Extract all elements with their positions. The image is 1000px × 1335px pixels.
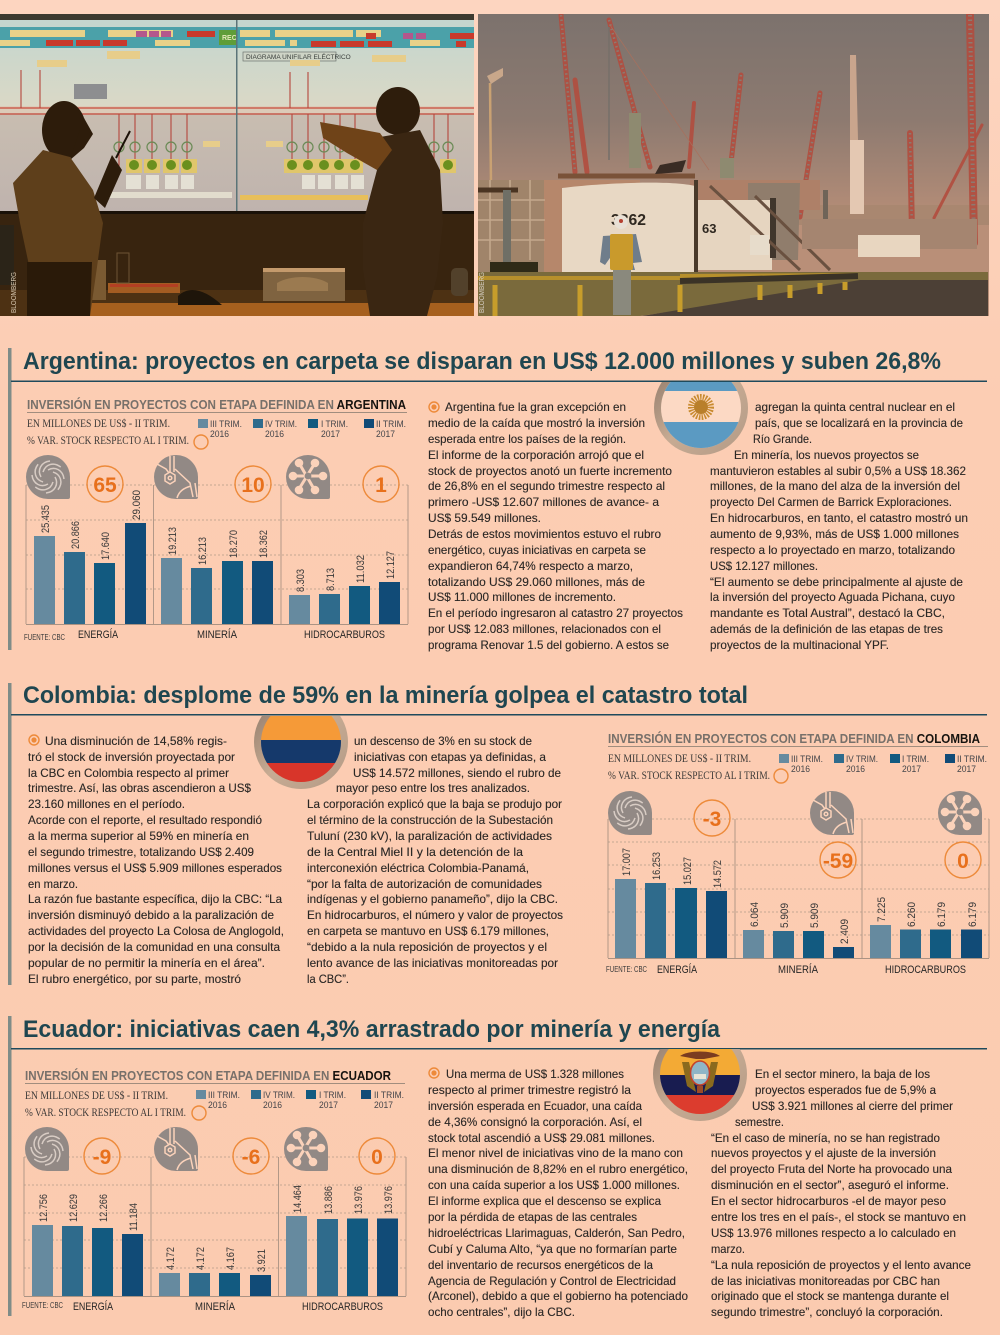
text column: Argentina 2: agregan la quinta central nuclear en el	[755, 400, 955, 414]
text column: Colombia 1: Una disminución de 14,58% regis-	[45, 734, 227, 748]
badge: hydrocarbons variation	[945, 842, 981, 878]
text column: Argentina 2: país, que se localizará en la provincia de	[755, 416, 963, 430]
text column: Ecuador 2: originado que el stock se mantenga durante el	[711, 1289, 949, 1303]
chart: Ecuador: MINERÍA	[195, 1300, 236, 1313]
text column: Ecuador 2: marzo.	[711, 1242, 745, 1256]
text column: Ecuador 1: Cubí y Caluma Alto, “ya que no formarían parte	[428, 1242, 677, 1256]
text column: Colombia 1: el segundo trimestre, totalizando US$ 2.409	[28, 845, 254, 859]
text column: Ecuador 1: ocho centrales”, dijo la CBC.	[428, 1305, 575, 1319]
legend: III TRIM.	[210, 419, 242, 430]
icon: bullet	[429, 1068, 439, 1078]
text column: Argentina 2: la inversión del proyecto Aguada Pichana, cuyo	[710, 590, 955, 604]
bars: hydrocarbons: 8.713	[325, 568, 337, 591]
text column: Argentina 2: Río Grande.	[753, 432, 812, 446]
legend: III TRIM.	[208, 1090, 240, 1101]
text column: Colombia 2: indígenas y el gobierno panameño”, dijo la CBC.	[307, 892, 558, 906]
text column: Argentina 2: proyectos de la multinacional YPF.	[710, 638, 889, 652]
text column: Colombia 2: el término de la construcción de la Subestación	[307, 813, 553, 827]
bars: mining: 18.270	[228, 530, 240, 558]
legend: II TRIM.	[957, 754, 987, 765]
text column: Argentina 1: totalizando US$ 29.060 millones, más de	[428, 575, 645, 589]
text column: Colombia 1: popular de no permitir la minería en el área”.	[28, 956, 265, 970]
bars: mining: 6.064	[749, 902, 761, 927]
text column: Colombia 2: lento avance de las iniciativas monitoreadas por	[307, 956, 558, 970]
icon: mining	[154, 1127, 198, 1171]
chart: Argentina: MINERÍA	[197, 628, 238, 641]
text column: Colombia 1: millones versus el US$ 5.909 millones esperados	[28, 861, 282, 875]
text column: Argentina 2: mantuvieron estables al subir 0,5% a US$ 18.362	[710, 464, 966, 478]
bars: energy: 29.060	[131, 490, 143, 520]
text column: Colombia 2: US$ 14.572 millones, siendo el rubro de	[353, 766, 561, 780]
text column: Argentina 2: millones, de la mano del alza de la inversión del	[710, 479, 960, 493]
bars: mining: 4.172	[165, 1247, 177, 1270]
bars: hydrocarbons: 13.886	[323, 1186, 335, 1214]
text column: Ecuador 1: hidroeléctricas Llarimaguas, Calderón, San Pedro,	[428, 1226, 685, 1240]
text column: Colombia 1	[28, 734, 284, 986]
bars: energy: 16.253	[651, 852, 663, 880]
chart: Ecuador	[22, 1068, 406, 1313]
text column: Colombia 1: trimestre. Así, las obras ascendieron a US$	[28, 781, 251, 795]
panel: Colombia	[8, 682, 989, 986]
bars: hydrocarbons: 13.976	[383, 1186, 395, 1214]
text column: Ecuador 1: (Arconel), debido a que el gobierno ha potenciado	[428, 1289, 688, 1303]
chart: Colombia: HIDROCARBUROS	[885, 964, 966, 976]
bars: hydrocarbons: 11.032	[355, 555, 367, 583]
panel: Argentina	[8, 348, 987, 652]
chart: Ecuador: HIDROCARBUROS	[302, 1301, 383, 1313]
text column: Colombia 2: iniciativas con etapas ya definidas, a	[354, 750, 546, 764]
legend: 2016	[208, 1100, 227, 1111]
chart: Colombia: ENERGÍA	[657, 963, 698, 976]
text column: Colombia 1: Acorde con el reporte, el resultado respondió	[28, 813, 262, 827]
text column: Argentina 1: esperada entre los países de la región.	[428, 432, 626, 446]
bars: energy: 12.629	[68, 1194, 80, 1222]
bars: hydrocarbons	[870, 897, 982, 958]
icon: Ecuador flag	[653, 1049, 747, 1121]
icon: energy	[25, 1127, 69, 1171]
legend	[196, 1090, 404, 1111]
text column: Colombia 2: un descenso de 3% en su stock de	[354, 734, 532, 748]
bars: mining: 5.909	[779, 903, 791, 928]
text column: Argentina 1: Detrás de estos movimientos estuvo el rubro	[428, 527, 661, 541]
chart: Colombia: % VAR. STOCK RESPECTO AL I TRIM.	[608, 770, 770, 782]
chart: Ecuador: EN MILLONES DE US$ - II TRIM.	[25, 1089, 168, 1102]
text column: Argentina 1: US$ 59.549 millones.	[428, 511, 541, 525]
bars: energy: 20.866	[70, 521, 82, 549]
chart title: INVERSIÓN EN PROYECTOS CON ETAPA DEFINIDA EN ECUADOR	[25, 1068, 392, 1083]
legend: 2017	[957, 764, 976, 775]
heading: Colombia: Colombia: desplome de 59% en la minería golpea el catastro total	[23, 682, 748, 709]
chart: Argentina: % VAR. STOCK RESPECTO AL I TRIM.	[27, 435, 189, 447]
bars: mining: 16.213	[197, 537, 209, 565]
text column: Argentina 2: mandante es Total Austral”, destacó la CBC,	[710, 606, 945, 620]
chart: Colombia: EN MILLONES DE US$ - II TRIM.	[608, 752, 751, 765]
badge: mining variation	[235, 466, 271, 502]
legend: 2016	[265, 429, 284, 440]
legend: 2017	[374, 1100, 393, 1111]
text column: Ecuador 2: semestre.	[735, 1115, 784, 1129]
chart: Colombia: MINERÍA	[778, 963, 819, 976]
text column: Colombia 1: tró el stock de inversión proyectada por	[28, 750, 235, 764]
text column: Ecuador 2: En el sector hidrocarburos -el de mayor peso	[711, 1194, 946, 1208]
bars: hydrocarbons: 7.225	[876, 897, 888, 922]
text column: Ecuador 2: nuevos proyectos y el ajuste de la inversión	[711, 1146, 936, 1160]
text column: Argentina 2: aumento de 9,93%, más de US$ 1.000 millones	[710, 527, 959, 541]
text column: Colombia 2: la CBC”.	[307, 972, 349, 986]
heading: Argentina: Argentina: proyectos en carpeta se disparan en US$ 12.000 millones y suben 26,8%	[23, 348, 941, 375]
text column: Argentina 1: El informe de la corporación arrojó que el	[428, 448, 644, 462]
text column: Ecuador 1: Agencia de Regulación y Control de Electricidad	[428, 1274, 676, 1288]
text column: Argentina 1: por US$ 12.083 millones, relacionados con el	[428, 622, 661, 636]
text column: Colombia 2: “debido a la nula reposición de proyectos y el	[307, 940, 547, 954]
bars: energy: 25.435	[40, 505, 52, 533]
photo: industrial plant: 63	[702, 221, 716, 236]
text column: Ecuador 2: entre los tres en el país-, el stock se mantuvo en	[711, 1210, 966, 1224]
text column: Argentina 2: En minería, los nuevos proyectos se	[734, 448, 919, 462]
text column: Ecuador 1: inversión esperada en Ecuador, una caída	[428, 1099, 642, 1113]
bars: hydrocarbons: 6.260	[906, 902, 918, 927]
bars: mining: 4.167	[225, 1247, 237, 1270]
bars: mining: 2.409	[839, 919, 851, 944]
icon: bullet	[29, 735, 39, 745]
bars: mining	[161, 527, 273, 624]
text column: Colombia 1: 23.160 millones en el período.	[28, 797, 185, 811]
text column: Colombia 2: “por la falta de autorización de comunidades	[307, 877, 542, 891]
text column: Colombia 2: en carpeta se mantuvo en US$ 6.179 millones,	[307, 924, 549, 938]
badge: energy variation	[87, 466, 123, 502]
text column: Colombia 2: La corporación explicó que la baja se produjo por	[307, 797, 562, 811]
text column: Ecuador 2	[711, 1067, 971, 1319]
text column: Argentina 2	[710, 400, 968, 652]
badge: hydrocarbons variation: 0	[957, 850, 969, 873]
icon: mining	[810, 791, 854, 835]
bars: energy: 15.027	[682, 857, 694, 885]
bars: hydrocarbons: 6.179	[967, 902, 979, 927]
icon: mining	[154, 455, 198, 499]
badge: hydrocarbons variation: 1	[375, 474, 387, 497]
text column: Colombia 2: de la Central Miel II y la detención de la	[307, 845, 523, 859]
panel: Ecuador	[8, 1016, 987, 1319]
bars: hydrocarbons: 12.127	[385, 551, 397, 579]
legend: 2016	[791, 764, 810, 775]
text column: Argentina 1: programa Renovar 1.5 del gobierno. A estos se	[428, 638, 669, 652]
bars: mining: 5.909	[809, 903, 821, 928]
badge: hydrocarbons variation	[359, 1138, 395, 1174]
text column: Ecuador 1: del inventario de recursos energéticos de la	[428, 1258, 653, 1272]
text column: Ecuador 1: de 4,36% consignó la corporación. Así, el	[428, 1115, 642, 1129]
chart title: INVERSIÓN EN PROYECTOS CON ETAPA DEFINIDA EN ARGENTINA	[27, 397, 407, 412]
chart: Argentina: ENERGÍA	[78, 628, 119, 641]
badge: energy variation	[694, 800, 730, 836]
text column: Argentina 1: energético, cuyas iniciativas en carpeta se	[428, 543, 646, 557]
text column: Colombia 2: En hidrocarburos, el número y valor de proyectos	[307, 908, 563, 922]
bars: mining	[743, 902, 854, 958]
bars: energy: 14.572	[712, 860, 724, 888]
legend: I TRIM.	[319, 1090, 346, 1101]
legend: II TRIM.	[374, 1090, 404, 1101]
chart: Argentina: HIDROCARBUROS	[304, 629, 385, 641]
bars: hydrocarbons: 6.179	[936, 902, 948, 927]
bars: mining	[159, 1247, 271, 1296]
chart: Ecuador: FUENTE: CBC	[22, 1301, 63, 1310]
bars: hydrocarbons: 14.464	[292, 1185, 304, 1213]
legend: IV TRIM.	[263, 1090, 295, 1101]
heading: Ecuador: Ecuador: iniciativas caen 4,3% arrastrado por minería y energía	[23, 1016, 720, 1043]
bars: mining: 18.362	[258, 530, 270, 558]
text column: Ecuador 2: disminución en el sector”, aseguró el informe.	[711, 1178, 949, 1192]
text column: Colombia 1: la CBC en Colombia respecto al primer	[28, 766, 229, 780]
text column: Colombia 1: actividades del proyecto La Colosa de Anglogold,	[28, 924, 284, 938]
bars: energy: 17.640	[100, 532, 112, 560]
text column: Argentina 1: primero -US$ 12.607 millones de avance- a	[428, 495, 659, 509]
text column: Ecuador 2: “La nula reposición de proyectos y el lento avance	[711, 1258, 971, 1272]
chart title: INVERSIÓN EN PROYECTOS CON ETAPA DEFINIDA EN COLOMBIA	[608, 731, 981, 746]
text column: Argentina 2: además de la definición de las etapas de tres	[710, 622, 943, 636]
text column: Ecuador 1: El menor nivel de iniciativas vino de la mano con	[428, 1146, 683, 1160]
text column: Ecuador 2: En el sector minero, la baja de los	[755, 1067, 930, 1081]
chart: Argentina: EN MILLONES DE US$ - II TRIM.	[27, 417, 170, 430]
text column: Argentina 1: de 26,8% en el segundo trimestre respecto al	[428, 479, 665, 493]
bars: energy	[32, 1194, 143, 1296]
legend: 2017	[319, 1100, 338, 1111]
photo: control room	[0, 14, 474, 316]
icon: bullet	[429, 402, 439, 412]
text column: Ecuador 1: Una merma de US$ 1.328 millones	[446, 1067, 624, 1081]
photo: control room: REC	[222, 35, 237, 42]
text column: Ecuador 2: “En el caso de minería, no se han registrado	[711, 1131, 940, 1145]
icon: hydrocarbons	[938, 791, 982, 835]
bars: energy	[615, 848, 727, 958]
photo: industrial plant	[477, 14, 989, 316]
legend	[779, 754, 987, 775]
bars: hydrocarbons	[289, 551, 400, 624]
legend	[198, 419, 406, 440]
badge: energy variation	[84, 1138, 120, 1174]
text column: Colombia 1: La razón fue bastante específica, dijo la CBC: “La	[28, 892, 282, 906]
text column: Colombia 1: por la decisión de la comunidad en una consulta	[28, 940, 280, 954]
text column: Ecuador 2: segundo trimestre”, concluyó la corporación.	[711, 1305, 943, 1319]
legend: IV TRIM.	[846, 754, 878, 765]
badge: mining variation	[233, 1138, 269, 1174]
badge: hydrocarbons variation: 0	[371, 1146, 383, 1169]
text column: Colombia 2: Tuluní (230 kV), la paralización de actividades	[307, 829, 552, 843]
bars: energy: 17.007	[621, 848, 633, 876]
text column: Argentina 2: “El aumento se debe principalmente al ajuste de	[710, 575, 963, 589]
text column: Ecuador 1	[428, 1067, 688, 1319]
legend: 2017	[376, 429, 395, 440]
text column: Colombia 2: mayor peso entre los tres analizados.	[336, 781, 530, 795]
text column: Argentina 1: stock de proyectos anotó un fuerte incremento	[428, 464, 672, 478]
text column: Colombia 1: El rubro energético, por su parte, mostró	[28, 972, 241, 986]
chart: Colombia	[606, 731, 989, 976]
legend: 2017	[902, 764, 921, 775]
credit: Bloomberg: BLOOMBERG	[477, 272, 486, 313]
text column: Argentina 2: US$ 12.127 millones.	[710, 559, 818, 573]
icon: Colombia flag	[254, 716, 348, 789]
legend: 2016	[263, 1100, 282, 1111]
text column: Argentina 1: medio de la caída que mostró la inversión	[428, 416, 645, 430]
text column: Argentina 2: respecto a lo proyectado en marzo, totalizando	[710, 543, 955, 557]
icon: energy	[26, 455, 70, 499]
text column: Colombia 1: en marzo.	[28, 877, 78, 891]
badge: energy variation: 65	[93, 474, 117, 497]
badge: mining variation: -59	[823, 850, 853, 873]
text column: Argentina 2: proyecto Del Carmen de Barrick Exploraciones.	[710, 495, 952, 509]
text column: Ecuador 2: US$ 3.921 millones al cierre del primer	[752, 1099, 953, 1113]
bars: energy: 12.756	[38, 1194, 50, 1222]
text column: Ecuador 1: El informe explica que el descenso se explica	[428, 1194, 661, 1208]
legend: III TRIM.	[791, 754, 823, 765]
figure: worker	[600, 215, 642, 315]
text column: Colombia 1: a la merma superior al 59% en minería en	[28, 829, 249, 843]
icon: hydrocarbons	[286, 455, 330, 499]
text column: Ecuador 1: con una caída superior a los US$ 1.000 millones.	[428, 1178, 680, 1192]
text column: Argentina 1	[428, 400, 683, 652]
text column: Ecuador 1: respecto al primer trimestre registró la	[428, 1083, 631, 1097]
text column: Ecuador 1: stock total ascendió a US$ 29.081 millones.	[428, 1131, 655, 1145]
text column: Ecuador 1: una disminución de 8,82% en el rubro energético,	[428, 1162, 688, 1176]
text column: Argentina 1: Argentina fue la gran excepción en	[445, 400, 626, 414]
bars: mining: 19.213	[167, 527, 179, 555]
icon: hydrocarbons	[284, 1127, 328, 1171]
text column: Argentina 1: expandieron 64,74% respecto a marzo,	[428, 559, 633, 573]
text column: Argentina 1: US$ 11.000 millones de incremento.	[428, 590, 616, 604]
bars: energy: 12.266	[98, 1194, 110, 1222]
bars: hydrocarbons: 13.976	[353, 1186, 365, 1214]
text column: Colombia 2	[307, 734, 563, 986]
text column: Argentina 1: En el período ingresaron al catastro 27 proyectos	[428, 606, 683, 620]
bars: energy: 11.184	[128, 1203, 140, 1231]
bars: energy	[34, 490, 146, 624]
text column: Argentina 2: En hidrocarburos, en tanto, el catastro mostró un	[710, 511, 968, 525]
badge: mining variation	[820, 842, 856, 878]
figure: man pointing	[320, 87, 443, 316]
photo: control room: DIAGRAMA UNIFILAR ELÉCTRICO	[246, 52, 351, 61]
text column: Colombia 1: inversión disminuyó debido a la paralización de	[28, 908, 274, 922]
chart: Ecuador: % VAR. STOCK RESPECTO AL I TRIM.	[25, 1107, 186, 1119]
figure: man with radio	[13, 101, 130, 316]
badge: energy variation: -9	[93, 1146, 111, 1169]
badge: mining variation: 10	[241, 474, 265, 497]
text column: Ecuador 2: proyectos esperados fue de 5,9% a	[755, 1083, 936, 1097]
photo: industrial plant: 3362	[611, 212, 646, 229]
text column: Ecuador 2: US$ 13.976 millones respecto a lo calculado en	[711, 1226, 956, 1240]
bars: hydrocarbons	[286, 1185, 398, 1296]
bars: mining: 4.172	[195, 1247, 207, 1270]
legend: 2016	[210, 429, 229, 440]
legend: II TRIM.	[376, 419, 406, 430]
badge: energy variation: -3	[703, 808, 721, 831]
text column: Colombia 2: interconexión eléctrica Colombia-Panamá,	[307, 861, 529, 875]
text column: Ecuador 2: de las iniciativas monitoreadas por CBC han	[711, 1274, 940, 1288]
badge: mining variation: -6	[242, 1146, 260, 1169]
bars: mining: 3.921	[256, 1249, 268, 1272]
badge: hydrocarbons variation	[363, 466, 399, 502]
chart: Colombia: FUENTE: CBC	[606, 965, 647, 974]
legend: 2017	[321, 429, 340, 440]
bars: hydrocarbons: 8.303	[295, 569, 307, 592]
legend: I TRIM.	[321, 419, 348, 430]
credit: Bloomberg: BLOOMBERG	[9, 272, 18, 313]
chart: Argentina	[24, 397, 408, 642]
legend: 2016	[846, 764, 865, 775]
legend: I TRIM.	[902, 754, 929, 765]
chart: Ecuador: ENERGÍA	[73, 1300, 114, 1313]
text column: Ecuador 1: por la pérdida de etapas de las centrales	[428, 1210, 637, 1224]
text column: Ecuador 2: del proyecto Fruta del Norte ha provocado una	[711, 1162, 952, 1176]
legend: IV TRIM.	[265, 419, 297, 430]
chart: Argentina: FUENTE: CBC	[24, 633, 65, 642]
icon: Argentina flag	[654, 382, 748, 455]
icon: energy	[608, 791, 652, 835]
